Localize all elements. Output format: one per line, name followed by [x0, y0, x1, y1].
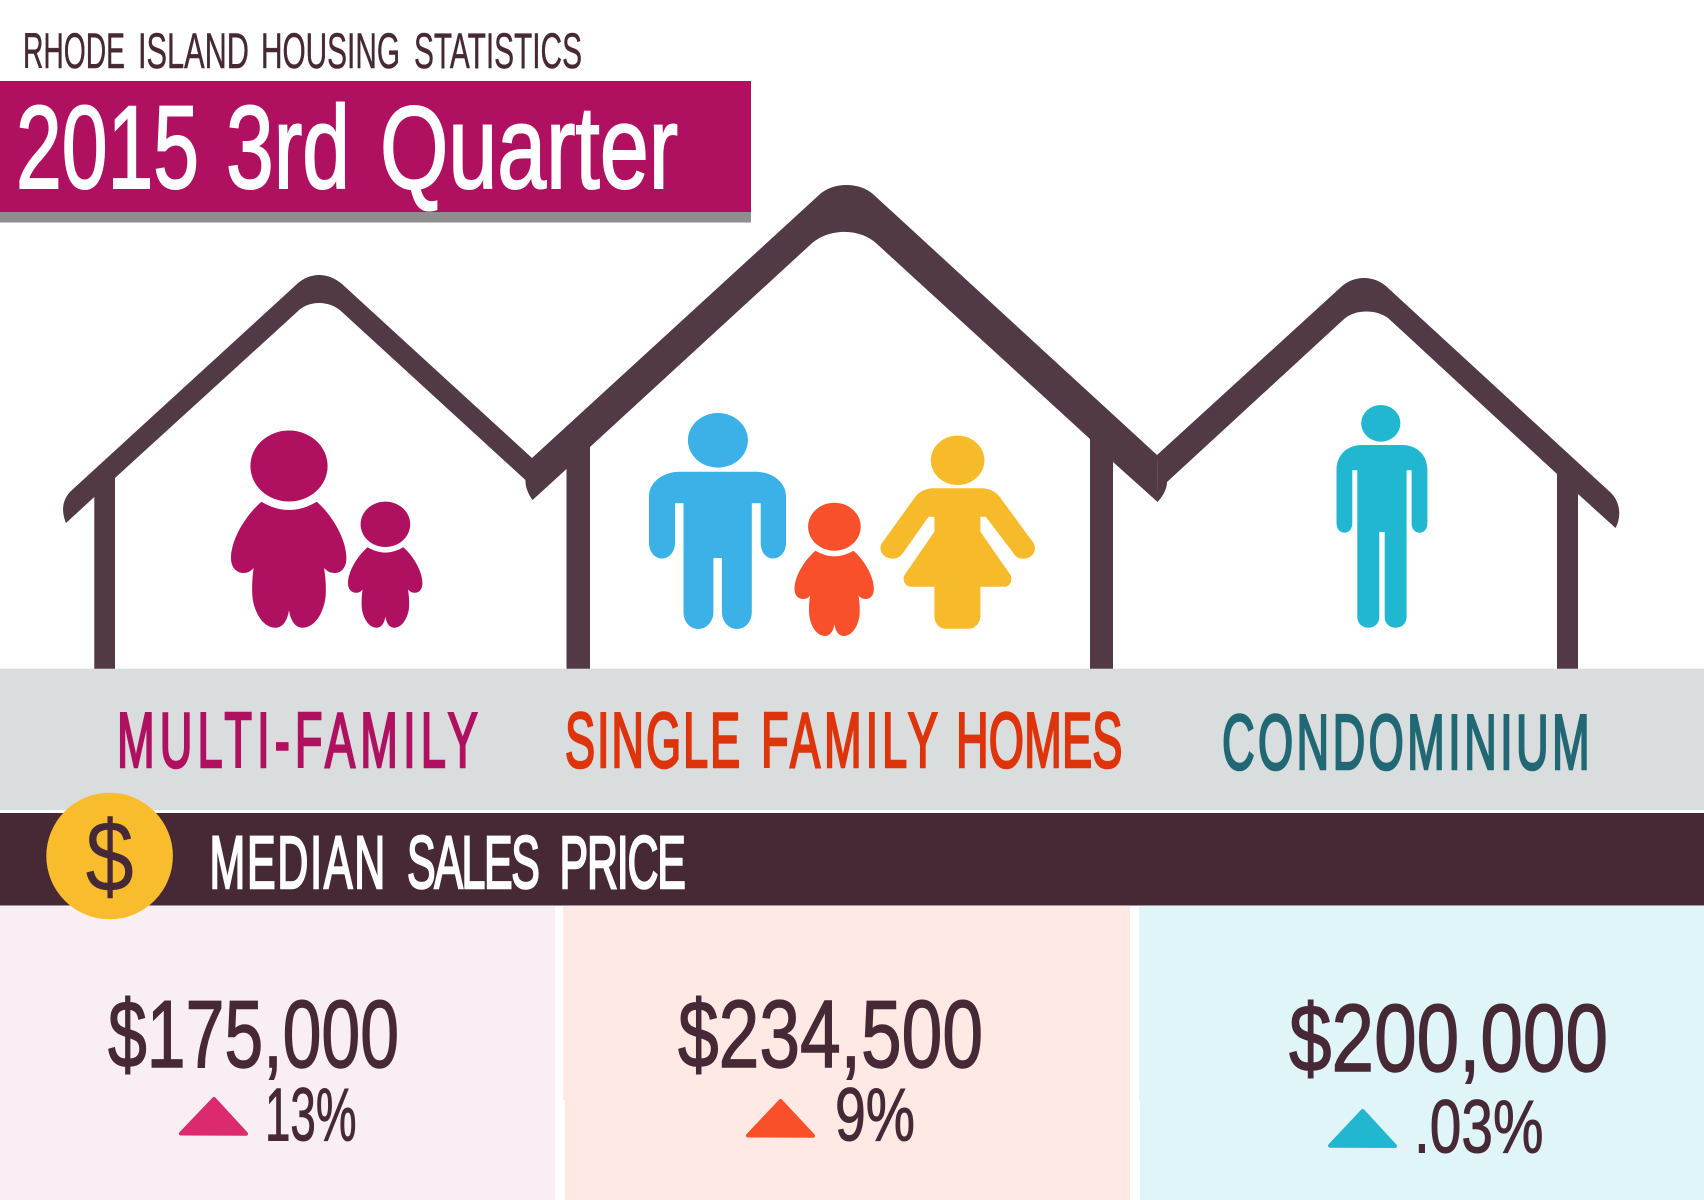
- subtitle: ISLAND: [138, 23, 249, 79]
- house outline: condominium: [1157, 278, 1619, 670]
- label: single family homes: FAMILY: [761, 696, 938, 784]
- icon: dollar coin: [46, 793, 173, 919]
- percent change: .03%: [1414, 1085, 1544, 1169]
- icon: child figure orange: [794, 503, 874, 636]
- category band: [0, 669, 1704, 810]
- price: $175,000: [108, 981, 399, 1088]
- percent change: 13%: [265, 1073, 356, 1157]
- house outline: single family: [532, 185, 1158, 670]
- banner background: [0, 81, 751, 212]
- stat: single family: [678, 981, 983, 1157]
- price: $200,000: [1289, 985, 1608, 1092]
- stat: multi-family: [108, 981, 399, 1157]
- label: multi-family: MULTI-FAMILY: [117, 696, 478, 784]
- icon: child figure magenta: [348, 502, 422, 628]
- icon: woman figure yellow: [880, 436, 1035, 629]
- label: single family homes: HOMES: [956, 696, 1122, 784]
- title: Quarter: [380, 82, 678, 214]
- banner shadow: [0, 212, 751, 222]
- title: 2015: [16, 82, 199, 214]
- icon: up triangle: [181, 1099, 246, 1134]
- subtitle: [23, 23, 582, 79]
- icon: adult figure magenta: [231, 430, 346, 628]
- header label: [210, 821, 686, 904]
- panel: condominium price: [1139, 906, 1704, 1200]
- icon: dollar coin: $: [85, 800, 134, 912]
- icon: up triangle: [748, 1101, 813, 1136]
- price panels: [0, 906, 1704, 1200]
- title: 3rd: [226, 82, 350, 214]
- median sales price header: [0, 793, 1704, 919]
- percent change: 9%: [835, 1073, 915, 1157]
- header label: SALES: [407, 821, 540, 904]
- band background: [0, 669, 1704, 810]
- subtitle: RHODE: [23, 23, 125, 79]
- header label: PRICE: [560, 821, 686, 904]
- subtitle: STATISTICS: [414, 23, 582, 79]
- stat: condominium: [1289, 985, 1608, 1169]
- house outline: multi-family: [63, 275, 552, 670]
- title: [16, 82, 678, 214]
- label: single family homes: [565, 696, 1122, 784]
- panel: single family price: [563, 906, 1130, 1200]
- icon: man figure blue: [649, 413, 786, 629]
- label: single family homes: SINGLE: [565, 696, 740, 784]
- house: multi-family: [63, 275, 552, 670]
- label: condominium: CONDOMINIUM: [1222, 698, 1590, 786]
- price: $234,500: [678, 981, 983, 1088]
- house: single family: [532, 185, 1158, 670]
- icon: up triangle: [1330, 1111, 1395, 1146]
- icon: man figure teal: [1336, 405, 1427, 628]
- panel: multi-family price: [0, 906, 555, 1200]
- subtitle: HOUSING: [261, 23, 400, 79]
- title banner: [0, 81, 751, 222]
- house: condominium: [1157, 278, 1619, 670]
- header bar: [0, 813, 1704, 906]
- header label: MEDIAN: [210, 821, 385, 904]
